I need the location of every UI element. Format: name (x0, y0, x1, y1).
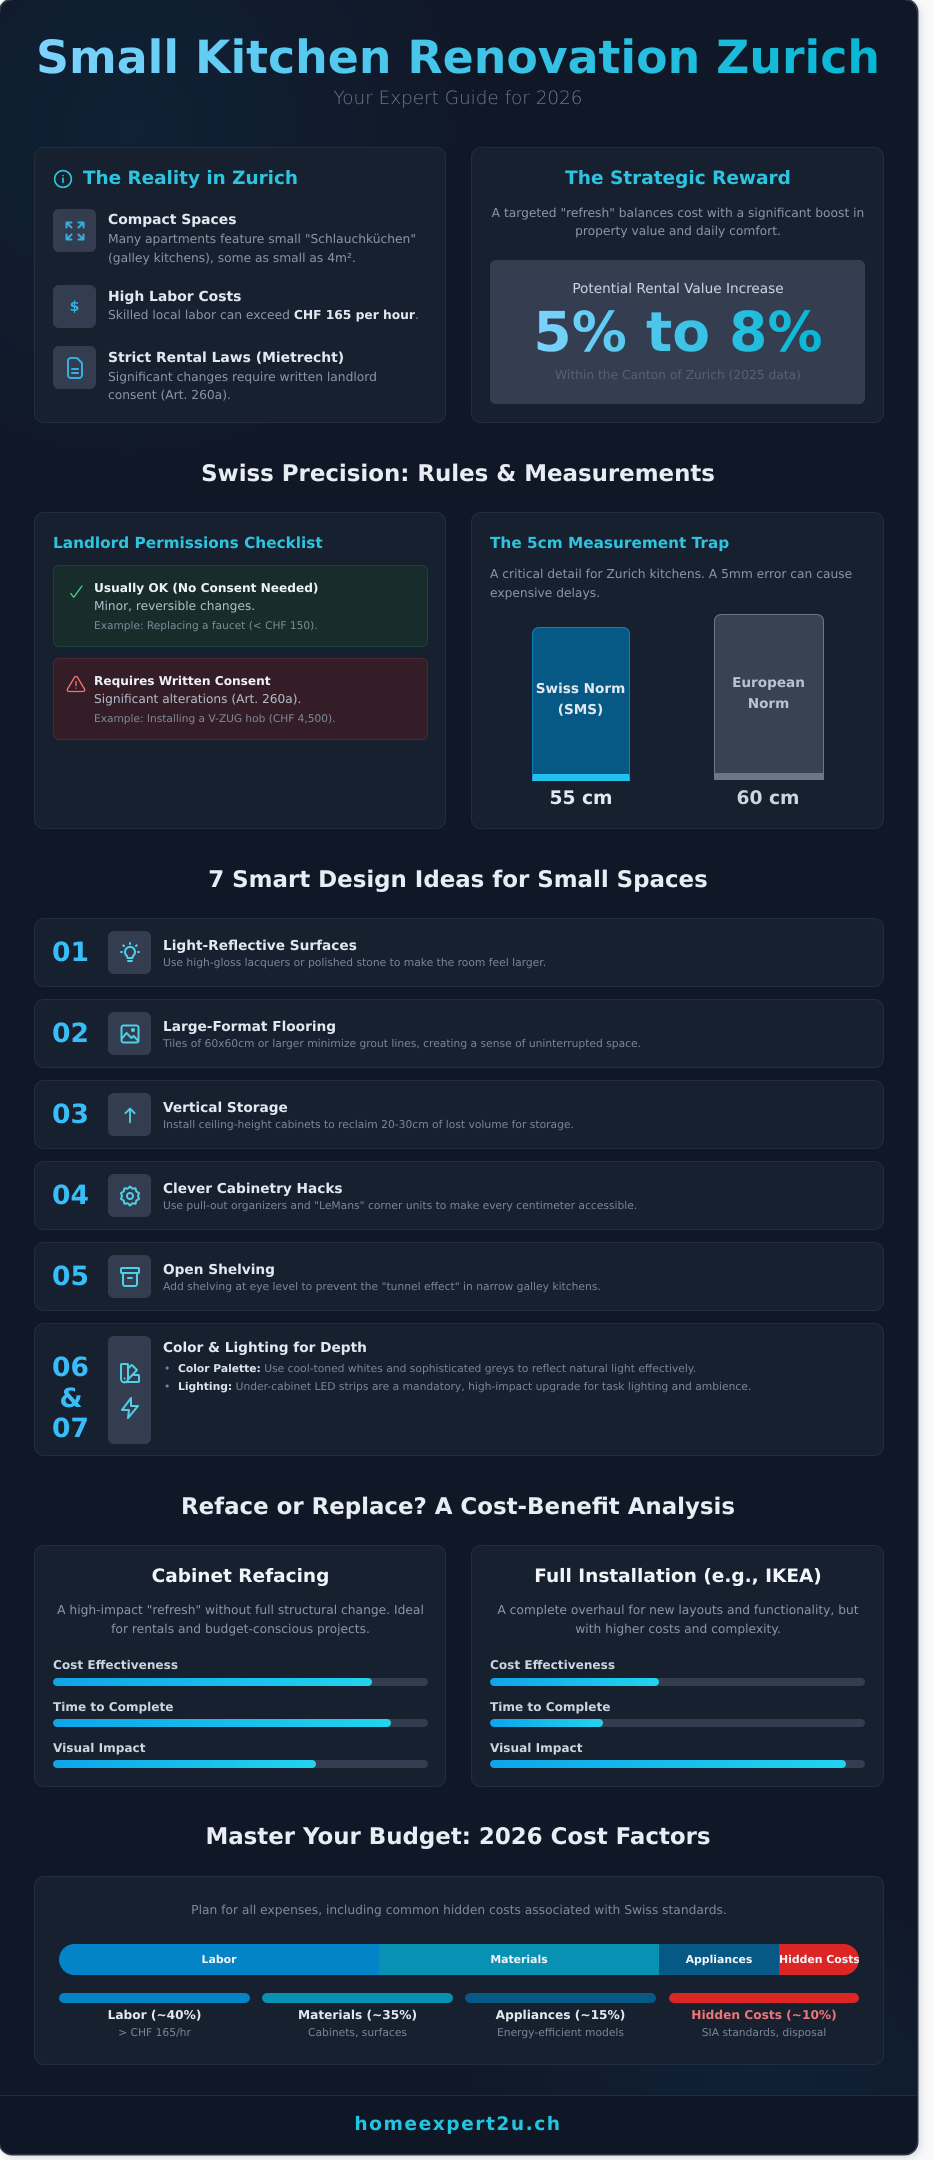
swatch (465, 1993, 656, 2003)
icon: arrow up (108, 1093, 151, 1136)
ampersand: & (59, 1383, 83, 1414)
panel heading: Full Installation (e.g., IKEA) (534, 1566, 822, 1587)
idea text: Install ceiling-height cabinets to reclaim 20-30cm of lost volume for storage. (163, 1118, 574, 1131)
legend: labor (59, 1993, 250, 2039)
item text: (galley kitchens), some as small as 4m². (108, 251, 356, 265)
stat box (490, 260, 865, 404)
callout heading: Usually OK (No Consent Needed) (94, 581, 318, 595)
item heading: Compact Spaces (108, 212, 236, 228)
metric label: Cost Effectiveness (53, 1658, 178, 1672)
idea 02 (34, 999, 884, 1068)
idea text: Add shelving at eye level to prevent the "tunnel effect" in narrow galley kitchens. (163, 1280, 601, 1293)
icon: archive box (108, 1255, 151, 1298)
legend title: Hidden Costs (~10%) (691, 2008, 837, 2022)
description: Plan for all expenses, including common hidden costs associated with Swiss standards. (191, 1903, 727, 1917)
idea title: Large-Format Flooring (163, 1019, 336, 1035)
metric label: Cost Effectiveness (490, 1658, 615, 1672)
bar value: 60 cm (737, 788, 799, 809)
number: 05 (52, 1261, 89, 1292)
icon: warning (66, 676, 86, 692)
idea title: Open Shelving (163, 1262, 275, 1278)
segment: hidden costs: Hidden Costs (779, 1953, 859, 1966)
icon: check (70, 585, 83, 598)
segment: labor (59, 1944, 379, 1975)
metric bar (490, 1719, 865, 1727)
description: A critical detail for Zurich kitchens. A 5mm error can cause (490, 567, 852, 581)
idea text: Use pull-out organizers and "LeMans" corner units to make every centimeter accessible. (163, 1199, 637, 1212)
callout: requires consent (53, 658, 428, 740)
bar value: 55 cm (550, 788, 612, 809)
description: for rentals and budget-conscious projects. (111, 1622, 370, 1636)
idea 05 (34, 1242, 884, 1311)
bullet: • (164, 1380, 170, 1393)
stat label: Potential Rental Value Increase (572, 281, 784, 297)
segment: appliances (659, 1944, 779, 1975)
panel heading: The 5cm Measurement Trap (490, 534, 729, 552)
description: A high-impact "refresh" without full structural change. Ideal (57, 1603, 424, 1617)
idea text: Use high-gloss lacquers or polished stone to make the room feel larger. (163, 956, 546, 969)
segment: materials (379, 1944, 659, 1975)
metric bar (53, 1719, 428, 1727)
legend title: Appliances (~15%) (496, 2008, 625, 2022)
swatch (669, 1993, 859, 2003)
icon tile: rental law (53, 346, 96, 389)
bar: swiss norm (532, 627, 630, 781)
panel heading: The Strategic Reward (565, 168, 791, 189)
bullet text: Lighting: Under-cabinet LED strips are a mandatory, high-impact upgrade for task lighting and ambience. (178, 1380, 751, 1393)
icon: gear (108, 1174, 151, 1217)
legend title: Materials (~35%) (298, 2008, 417, 2022)
idea title: Vertical Storage (163, 1100, 288, 1116)
idea 01 (34, 918, 884, 987)
item text: Many apartments feature small "Schlauchküchen" (108, 232, 416, 246)
bar: european norm (714, 614, 824, 780)
icon tile: labor cost (53, 285, 96, 328)
swatch (59, 1993, 250, 2003)
callout example: Example: Replacing a faucet (< CHF 150). (94, 620, 318, 632)
item text: consent (Art. 260a). (108, 388, 231, 402)
metric bar (53, 1678, 428, 1686)
footer link: homeexpert2u.ch (354, 2114, 562, 2135)
bar label: Norm (748, 696, 789, 712)
idea title: Light-Reflective Surfaces (163, 938, 357, 954)
idea text: Tiles of 60x60cm or larger minimize grout lines, creating a sense of uninterrupted space. (163, 1037, 641, 1050)
icon: info (54, 170, 72, 188)
panel: measurement trap (471, 512, 884, 829)
segment: appliances: Appliances (686, 1953, 752, 1966)
bar label: (SMS) (558, 702, 603, 718)
number: 03 (52, 1099, 89, 1130)
description: A complete overhaul for new layouts and functionality, but (497, 1603, 859, 1617)
legend: hidden costs (669, 1993, 859, 2039)
panel heading: The Reality in Zurich (83, 168, 298, 189)
stat note: Within the Canton of Zurich (2025 data) (555, 368, 801, 382)
section heading: reface or replace: Reface or Replace? A Cost-Benefit Analysis (181, 1494, 735, 1520)
metric label: Visual Impact (490, 1741, 582, 1755)
description: with higher costs and complexity. (575, 1622, 781, 1636)
item heading: High Labor Costs (108, 289, 241, 305)
metric bar (490, 1760, 865, 1768)
number: 02 (52, 1018, 89, 1049)
idea 03 (34, 1080, 884, 1149)
panel: the reality in zurich (34, 147, 446, 423)
segment: labor: Labor (202, 1953, 236, 1966)
metric bar (490, 1678, 865, 1686)
bullet text: Color Palette: Use cool-toned whites and sophisticated greys to reflect natural light effectively. (178, 1362, 696, 1375)
legend: materials (262, 1993, 453, 2039)
idea 06 and 07 (34, 1323, 884, 1456)
title: Small Kitchen Renovation Zurich (36, 30, 880, 84)
callout text: Significant alterations (Art. 260a). (94, 692, 301, 706)
panel: cabinet refacing (34, 1545, 446, 1787)
subtitle: Your Expert Guide for 2026 (334, 88, 582, 109)
item text: Significant changes require written landlord (108, 370, 377, 384)
item heading: Strict Rental Laws (Mietrecht) (108, 350, 344, 366)
metric label: Visual Impact (53, 1741, 146, 1755)
icon tile: labor cost: $ (70, 298, 79, 314)
description: expensive delays. (490, 586, 600, 600)
number: 06 (52, 1352, 89, 1383)
legend note: Cabinets, surfaces (308, 2026, 407, 2039)
icon: light bulb (108, 931, 151, 974)
segment: materials: Materials (490, 1953, 548, 1966)
callout text: Minor, reversible changes. (94, 599, 255, 613)
stacked bar (59, 1944, 859, 1975)
callout: usually ok (53, 565, 428, 647)
idea title: Clever Cabinetry Hacks (163, 1181, 343, 1197)
panel: landlord permissions (34, 512, 446, 829)
bullet: • (164, 1362, 170, 1375)
stat value: 5% to 8% (533, 300, 823, 364)
legend: appliances (465, 1993, 656, 2039)
legend title: Labor (~40%) (108, 2008, 201, 2022)
metric label: Time to Complete (490, 1700, 610, 1714)
callout example: Example: Installing a V-ZUG hob (CHF 4,500). (94, 713, 336, 725)
icon: image (108, 1012, 151, 1055)
icon tile: compact spaces (53, 209, 96, 252)
legend note: > CHF 165/hr (118, 2026, 191, 2039)
callout heading: Requires Written Consent (94, 674, 271, 688)
panel heading: Cabinet Refacing (152, 1566, 329, 1587)
segment: hidden costs (779, 1944, 859, 1975)
metric bar (53, 1760, 428, 1768)
section heading: budget: Master Your Budget: 2026 Cost Factors (205, 1824, 711, 1850)
panel: strategic reward (471, 147, 884, 423)
number: 01 (52, 937, 89, 968)
item text: Skilled local labor can exceed CHF 165 per hour. (108, 308, 419, 322)
description: A targeted "refresh" balances cost with a significant boost in (492, 206, 864, 220)
idea title: Color & Lighting for Depth (163, 1340, 367, 1356)
panel heading: Landlord Permissions Checklist (53, 534, 323, 552)
section heading: design ideas: 7 Smart Design Ideas for Small Spaces (208, 867, 708, 893)
number: 07 (52, 1413, 89, 1444)
metric label: Time to Complete (53, 1700, 173, 1714)
idea 04 (34, 1161, 884, 1230)
description: property value and daily comfort. (575, 224, 781, 238)
legend note: Energy-efficient models (497, 2026, 624, 2039)
section heading: swiss precision: Swiss Precision: Rules & Measurements (201, 461, 715, 487)
number: 04 (52, 1180, 89, 1211)
legend note: SIA standards, disposal (702, 2026, 826, 2039)
swatch (262, 1993, 453, 2003)
panel: budget (34, 1876, 884, 2065)
bar label: Swiss Norm (536, 680, 625, 696)
panel: full installation (471, 1545, 884, 1787)
bar label: European (732, 674, 805, 690)
footer (0, 2095, 917, 2155)
icon tile: palette and bolt (108, 1336, 151, 1444)
